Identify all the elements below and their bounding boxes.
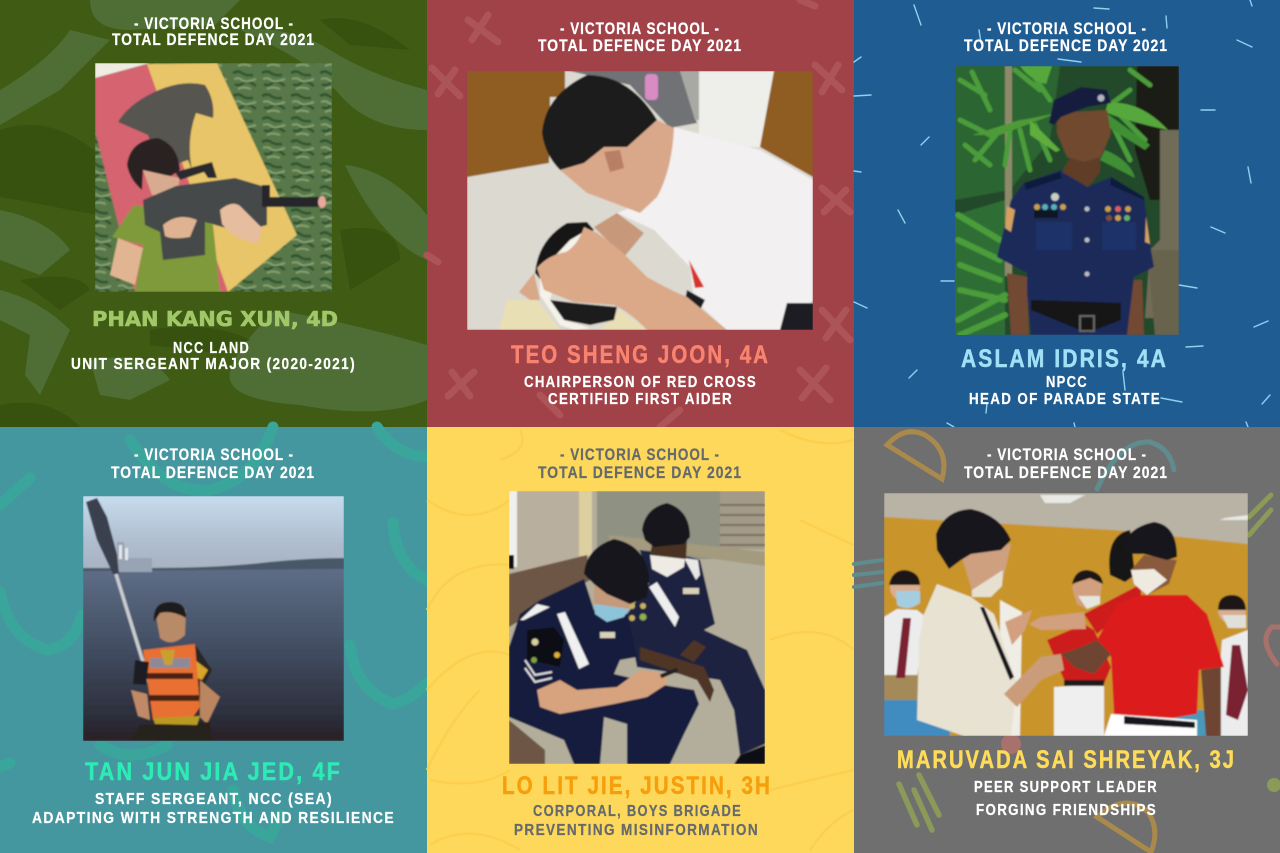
heading: [112, 15, 315, 49]
panel: Tan Jun Jia Jed: [0, 427, 427, 853]
panel background: camouflage: [0, 0, 427, 427]
name: TAN JUN JIA JED, 4F: [85, 758, 342, 786]
panel background: geometric shapes: [854, 427, 1280, 853]
heading: TOTAL DEFENCE DAY 2021: [112, 31, 315, 49]
role: [974, 779, 1158, 819]
role: [32, 791, 395, 827]
role: CHAIRPERSON OF RED CROSS: [524, 374, 757, 391]
name: PHAN KANG XUN, 4D: [92, 307, 338, 331]
photo: first aider bandaging a head: [467, 71, 813, 330]
role: PREVENTING MISINFORMATION: [514, 822, 759, 839]
role: ADAPTING WITH STRENGTH AND RESILIENCE: [32, 810, 395, 827]
heading: - VICTORIA SCHOOL -: [987, 446, 1147, 464]
panel: Lo Lit Jie, Justin: [427, 427, 854, 853]
heading: [964, 20, 1168, 55]
role: NCC LAND: [173, 340, 250, 357]
panel: Aslam Idris: [854, 0, 1280, 427]
photo: NPCC cadet in uniform: [955, 66, 1179, 335]
role: PEER SUPPORT LEADER: [974, 779, 1158, 796]
role: NPCC: [1046, 374, 1088, 391]
panel: Maruvada Sai Shreyak: [854, 427, 1280, 853]
role: CERTIFIED FIRST AIDER: [548, 391, 733, 408]
role: CORPORAL, BOYS BRIGADE: [533, 803, 742, 820]
photo: student with rifle on NCC flag: [95, 63, 332, 292]
role: UNIT SERGEANT MAJOR (2020-2021): [71, 356, 356, 373]
role: [969, 374, 1161, 408]
role: FORGING FRIENDSHIPS: [976, 802, 1157, 819]
panel background: dashes: [854, 0, 1280, 427]
heading: [111, 446, 315, 482]
photo: student with paddle in the sea: [83, 496, 344, 741]
heading: - VICTORIA SCHOOL -: [134, 446, 294, 464]
heading: [964, 446, 1168, 482]
heading: TOTAL DEFENCE DAY 2021: [964, 37, 1168, 55]
photo: two cadets looking at a phone: [509, 491, 765, 764]
heading: - VICTORIA SCHOOL -: [560, 20, 720, 38]
heading: TOTAL DEFENCE DAY 2021: [964, 464, 1168, 482]
name: LO LIT JIE, JUSTIN, 3H: [502, 772, 772, 800]
role: [71, 340, 356, 373]
photo: students fist-bumping in a classroom: [884, 493, 1248, 736]
heading: [538, 446, 742, 482]
panel: Teo Sheng Joon: [427, 0, 854, 427]
heading: - VICTORIA SCHOOL -: [560, 446, 720, 464]
name: ASLAM IDRIS, 4A: [961, 345, 1168, 373]
role: HEAD OF PARADE STATE: [969, 391, 1161, 408]
role: [524, 374, 757, 408]
panel: Phan Kang Xun: [0, 0, 427, 427]
panel background: teal shapes: [0, 427, 427, 853]
panel background: wavy lines: [427, 427, 854, 853]
heading: TOTAL DEFENCE DAY 2021: [538, 37, 742, 55]
heading: - VICTORIA SCHOOL -: [987, 20, 1147, 38]
heading: TOTAL DEFENCE DAY 2021: [111, 464, 315, 482]
panel background: crosses: [427, 0, 854, 427]
role: [514, 803, 759, 839]
heading: [538, 20, 742, 55]
role: STAFF SERGEANT, NCC (SEA): [95, 791, 333, 808]
name: TEO SHENG JOON, 4A: [511, 341, 770, 369]
heading: - VICTORIA SCHOOL -: [134, 15, 294, 33]
heading: TOTAL DEFENCE DAY 2021: [538, 464, 742, 482]
